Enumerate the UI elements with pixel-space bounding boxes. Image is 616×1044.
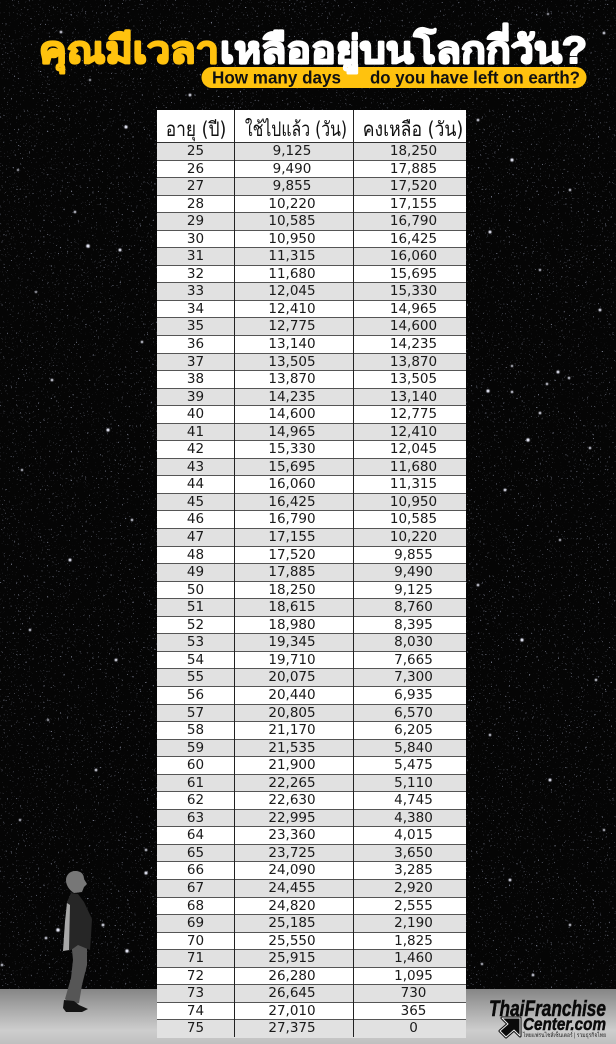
table rows: 22,630: [268, 792, 316, 808]
table rows: 10,585: [268, 213, 316, 229]
table rows: 19,345: [268, 634, 316, 650]
table rows: 8,030: [394, 634, 433, 650]
table rows: 20,075: [268, 669, 316, 685]
table rows: 7,665: [394, 652, 433, 668]
table rows: 52: [187, 617, 204, 633]
data table: age, days used, days remaining: [157, 110, 466, 1038]
table rows: 2,920: [394, 880, 433, 896]
table rows: 27: [187, 178, 204, 194]
table rows: 72: [187, 968, 204, 984]
table rows: 24,455: [268, 880, 316, 896]
table rows: 74: [187, 1003, 204, 1019]
table rows: 6,205: [394, 722, 433, 738]
table rows: 6,935: [394, 687, 433, 703]
table rows: 15,330: [268, 441, 316, 457]
table rows: 10,950: [268, 231, 316, 247]
table rows: 1,095: [394, 968, 433, 984]
table rows: 37: [187, 354, 204, 370]
table rows: 16,060: [390, 248, 437, 264]
table header: อายุ (ปี): [165, 117, 226, 141]
table rows: 32: [187, 266, 204, 282]
table rows: 64: [187, 827, 204, 843]
table rows: 41: [187, 424, 204, 440]
table rows: 55: [187, 669, 204, 685]
table rows: 49: [187, 564, 204, 580]
table rows: 23,360: [268, 827, 316, 843]
table rows: 5,110: [394, 775, 433, 791]
table rows: 9,855: [394, 547, 433, 563]
headline: yellow part: คุณมีเวลา: [39, 30, 219, 74]
table rows: 18,250: [390, 143, 437, 159]
table rows: 9,125: [273, 143, 311, 159]
table rows: 14,235: [268, 389, 316, 405]
table rows: 75: [187, 1020, 204, 1036]
table rows: 10,585: [390, 511, 437, 527]
table rows: 17,885: [390, 161, 437, 177]
table rows: 14,235: [390, 336, 437, 352]
table rows: 60: [187, 757, 204, 773]
table rows: 24,820: [268, 898, 316, 914]
table rows: 27,010: [268, 1003, 316, 1019]
table rows: 54: [187, 652, 204, 668]
table rows: 56: [187, 687, 204, 703]
subtitle left text: How many days: [212, 68, 341, 88]
table rows: 11,680: [268, 266, 316, 282]
legs: [65, 940, 87, 1004]
table rows: 23,725: [268, 845, 316, 861]
table rows: 5,840: [394, 740, 433, 756]
table rows: 13,870: [390, 354, 437, 370]
table rows: 15,695: [268, 459, 316, 475]
table rows: 12,045: [390, 441, 437, 457]
table rows: 12,775: [268, 318, 316, 334]
table rows: 17,520: [390, 178, 437, 194]
table rows: 6,570: [394, 704, 433, 720]
table rows: 24,090: [268, 862, 316, 878]
table rows: 62: [187, 792, 204, 808]
table rows: 14,600: [268, 406, 316, 422]
table rows: 27,375: [268, 1020, 316, 1036]
table rows: 21,535: [268, 740, 316, 756]
coat: [63, 893, 92, 951]
table header: คงเหลือ (วัน): [363, 117, 463, 141]
table rows: 25: [187, 143, 204, 159]
table rows: 13,140: [268, 336, 316, 352]
table rows: 11,315: [390, 476, 437, 492]
table rows: 1,825: [394, 933, 433, 949]
table rows: 47: [187, 529, 204, 545]
table rows: 22,995: [268, 810, 316, 826]
table rows: 16,790: [390, 213, 437, 229]
table rows: 8,760: [394, 599, 433, 615]
table rows: 29: [187, 213, 204, 229]
table rows: 35: [187, 318, 204, 334]
table rows: 9,490: [394, 564, 433, 580]
table rows: 14,600: [390, 318, 437, 334]
table rows: 730: [401, 985, 426, 1001]
table rows: 13,505: [390, 371, 437, 387]
table rows: 8,395: [394, 617, 433, 633]
table rows: 22,265: [268, 775, 316, 791]
table rows: 17,885: [268, 564, 316, 580]
table rows: 30: [187, 231, 204, 247]
logo arrow icon: [500, 1018, 520, 1037]
table rows: 26,645: [268, 985, 316, 1001]
table rows: 34: [187, 301, 204, 317]
table rows: 42: [187, 441, 204, 457]
table rows: 16,425: [268, 494, 316, 510]
table rows: 44: [187, 476, 204, 492]
table rows: 4,380: [394, 810, 433, 826]
table rows: 51: [187, 599, 204, 615]
table rows: 17,155: [268, 529, 316, 545]
table rows: 20,805: [268, 704, 316, 720]
table rows: 2,555: [394, 898, 433, 914]
table rows: 10,950: [390, 494, 437, 510]
table rows: 12,045: [268, 283, 316, 299]
table rows: 19,710: [268, 652, 316, 668]
table rows: 12,410: [390, 424, 437, 440]
table header: [157, 110, 466, 143]
table rows: 66: [187, 862, 204, 878]
shirt edge: [63, 903, 70, 951]
subtitle right text: do you have left on earth?: [370, 68, 580, 88]
table rows: 2,190: [394, 915, 433, 931]
table rows: 25,915: [268, 950, 316, 966]
table rows: 10,220: [390, 529, 437, 545]
table rows: 17,520: [268, 547, 316, 563]
table rows: 7,300: [394, 669, 433, 685]
table rows: 10,220: [268, 196, 316, 212]
table rows: 17,155: [390, 196, 437, 212]
table rows: 36: [187, 336, 204, 352]
table rows: 67: [187, 880, 204, 896]
table rows: 3,650: [394, 845, 433, 861]
head: [66, 871, 87, 893]
table rows: 365: [401, 1003, 426, 1019]
table rows: 59: [187, 740, 204, 756]
table rows: 21,170: [268, 722, 316, 738]
table rows: 25,550: [268, 933, 316, 949]
table rows: 5,475: [394, 757, 433, 773]
table rows: 12,775: [390, 406, 437, 422]
table rows: 28: [187, 196, 204, 212]
table rows: 13,140: [390, 389, 437, 405]
table rows: 53: [187, 634, 204, 650]
table rows: 33: [187, 283, 204, 299]
logo wordmark line 2: Center.com: [523, 1014, 606, 1034]
table rows: 50: [187, 582, 204, 598]
table rows: 26: [187, 161, 204, 177]
subtitle pill: [202, 67, 586, 88]
table rows: 43: [187, 459, 204, 475]
table rows: 73: [187, 985, 204, 1001]
table rows: 12,410: [268, 301, 316, 317]
table rows: 26,280: [268, 968, 316, 984]
table rows: 0: [409, 1020, 418, 1036]
table rows: 48: [187, 547, 204, 563]
table header: ใช้ไปแล้ว (วัน): [245, 117, 347, 141]
table rows: [157, 143, 466, 1038]
table rows: 45: [187, 494, 204, 510]
table rows: 18,250: [268, 582, 316, 598]
table rows: 11,680: [390, 459, 437, 475]
table rows: 9,125: [394, 582, 433, 598]
table rows: 15,695: [390, 266, 437, 282]
shoes: [63, 1000, 88, 1012]
table rows: 16,790: [268, 511, 316, 527]
table rows: 1,460: [394, 950, 433, 966]
table rows: 20,440: [268, 687, 316, 703]
table rows: 69: [187, 915, 204, 931]
table rows: 65: [187, 845, 204, 861]
table rows: 3,285: [394, 862, 433, 878]
table rows: 39: [187, 389, 204, 405]
table rows: 46: [187, 511, 204, 527]
table rows: 16,060: [268, 476, 316, 492]
table rows: 13,505: [268, 354, 316, 370]
table rows: 14,965: [390, 301, 437, 317]
table rows: 70: [187, 933, 204, 949]
table rows: 14,965: [268, 424, 316, 440]
table rows: 21,900: [268, 757, 316, 773]
table rows: 4,745: [394, 792, 433, 808]
table rows: 9,855: [273, 178, 311, 194]
table rows: 40: [187, 406, 204, 422]
table rows: 58: [187, 722, 204, 738]
table rows: 31: [187, 248, 204, 264]
title: Thai headline with English subtitle pill: [39, 22, 587, 88]
table rows: 13,870: [268, 371, 316, 387]
table rows: 68: [187, 898, 204, 914]
table rows: 16,425: [390, 231, 437, 247]
table rows: 11,315: [268, 248, 316, 264]
table rows: 15,330: [390, 283, 437, 299]
table rows: 63: [187, 810, 204, 826]
table rows: 18,615: [268, 599, 316, 615]
table rows: 25,185: [268, 915, 316, 931]
table rows: 57: [187, 704, 204, 720]
table rows: 71: [187, 950, 204, 966]
table rows: 18,980: [268, 617, 316, 633]
headline: white part: เหลืออยู่บนโลกกี่วัน?: [220, 23, 587, 74]
table rows: 4,015: [394, 827, 433, 843]
table rows: 61: [187, 775, 204, 791]
table rows: 9,490: [273, 161, 311, 177]
table rows: 38: [187, 371, 204, 387]
